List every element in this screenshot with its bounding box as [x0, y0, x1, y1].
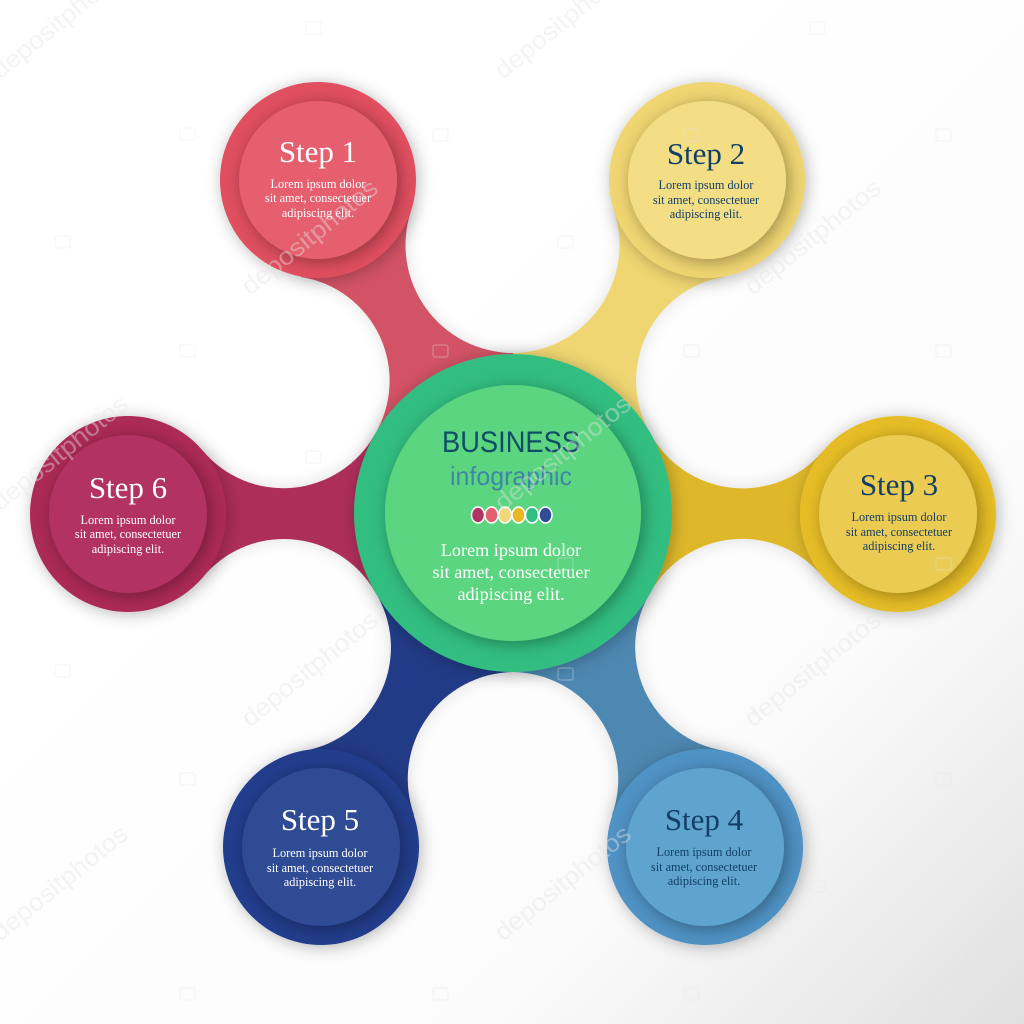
watermark: depositphotos — [489, 820, 637, 947]
connector: step 3 — [513, 434, 898, 592]
watermark: depositphotos — [236, 174, 384, 301]
text: step 3 body: Lorem ipsum dolor — [852, 510, 946, 524]
watermark: depositphotos — [236, 606, 384, 733]
text: center body — [432, 540, 590, 604]
heading: step 1: Step 1 — [279, 134, 357, 169]
heading: step 2: Step 2 — [667, 136, 745, 171]
text: step 4 body — [651, 845, 757, 888]
text: step 6 body: Lorem ipsum dolor — [81, 513, 175, 527]
text: step 5 body: adipiscing elit. — [284, 875, 356, 889]
text: step 6 body: adipiscing elit. — [92, 542, 164, 556]
text: step 1 body: Lorem ipsum dolor — [271, 177, 365, 191]
text: step 1 body: adipiscing elit. — [282, 206, 354, 220]
connector: step 2 — [513, 180, 724, 513]
text: step 3 body: adipiscing elit. — [863, 539, 935, 553]
connector: step 6 — [128, 435, 513, 591]
text: step 2 body: Lorem ipsum dolor — [659, 178, 753, 192]
node: step 3 — [800, 416, 996, 612]
text: center body: sit amet, consectetuer — [432, 562, 590, 582]
title: BUSINESS — [442, 426, 580, 459]
node: step 6 — [30, 416, 226, 612]
heading: step 3: Step 3 — [860, 467, 938, 502]
connector: step 4 — [513, 513, 723, 847]
heading: step 4: Step 4 — [665, 802, 744, 837]
text: step 2 body — [653, 178, 759, 221]
text: step 6 body: sit amet, consectetuer — [75, 527, 181, 541]
text: step 1 body: sit amet, consectetuer — [265, 191, 371, 205]
text: step 4 body: adipiscing elit. — [668, 874, 740, 888]
text: step 3 body — [846, 510, 952, 553]
node: step 2 — [609, 82, 805, 278]
watermark: depositphotos — [739, 606, 887, 733]
text: step 2 body: sit amet, consectetuer — [653, 193, 759, 207]
center hub — [354, 354, 672, 672]
node: step 5 — [223, 749, 419, 945]
text: step 5 body: Lorem ipsum dolor — [273, 846, 367, 860]
heading: step 6: Step 6 — [89, 470, 167, 505]
watermark: depositphotos — [489, 390, 637, 517]
connector: step 1 — [301, 180, 513, 513]
text: step 1 body — [265, 177, 371, 220]
watermark: depositphotos — [739, 174, 887, 301]
text: step 5 body — [267, 846, 373, 889]
connector arms — [128, 180, 898, 847]
text: center body: adipiscing elit. — [457, 584, 565, 604]
connector: step 5 — [303, 513, 513, 847]
text: step 4 body: sit amet, consectetuer — [651, 860, 757, 874]
heading: step 5: Step 5 — [281, 802, 359, 837]
node: step 1 — [220, 82, 416, 278]
text: step 6 body — [75, 513, 181, 556]
subtitle: infographic — [450, 461, 572, 491]
text: center body: Lorem ipsum dolor — [441, 540, 581, 560]
text: step 4 body: Lorem ipsum dolor — [657, 845, 751, 859]
colour dots — [472, 507, 552, 523]
text: step 2 body: adipiscing elit. — [670, 207, 742, 221]
node: step 4 — [607, 749, 803, 945]
text: step 5 body: sit amet, consectetuer — [267, 861, 373, 875]
text: step 3 body: sit amet, consectetuer — [846, 525, 952, 539]
